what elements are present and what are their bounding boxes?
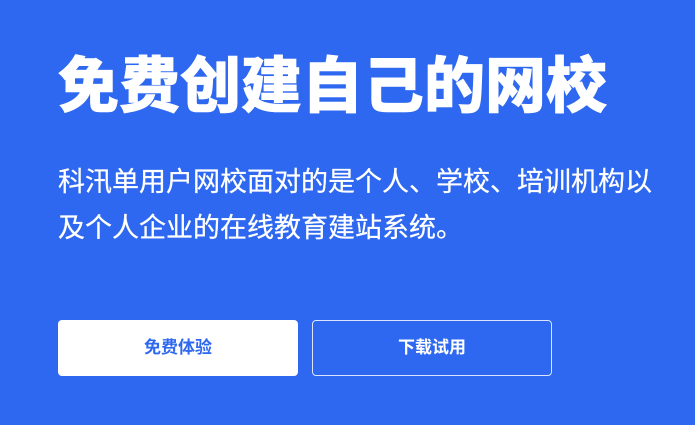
button: free trial: 免费体验: [144, 338, 212, 357]
button: download trial: 下载试用: [398, 338, 466, 357]
title: 免费创建自己的网校: [58, 52, 607, 120]
description text: 科汛单用户网校面对的是个人、学校、培训机构以: [58, 167, 652, 197]
button: download trial: [312, 320, 552, 376]
description text: 及个人企业的在线教育建站系统。: [58, 213, 463, 243]
button: free trial: [58, 320, 298, 376]
description text: [58, 167, 652, 243]
